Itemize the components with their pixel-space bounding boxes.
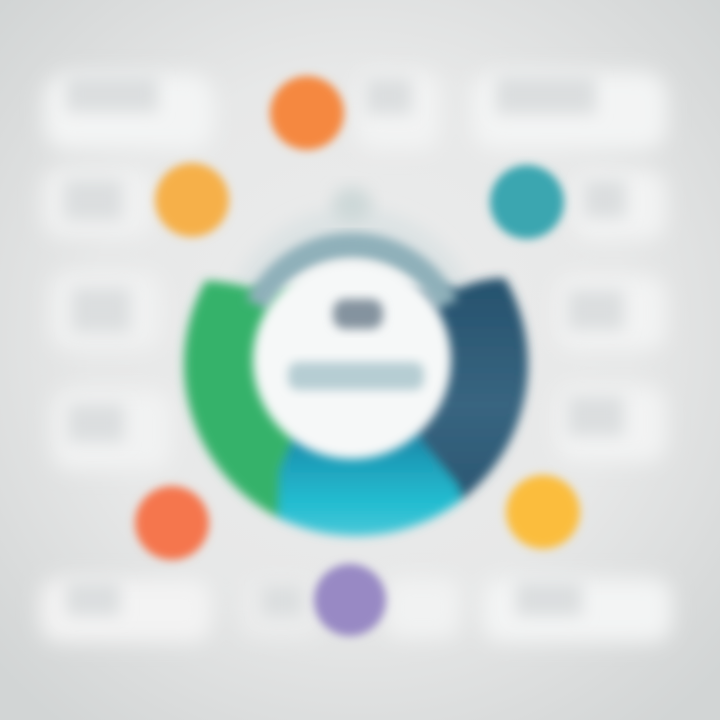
icon: orange circle bbox=[270, 76, 344, 150]
centre label bbox=[288, 362, 424, 390]
grey-blue inner ring bbox=[258, 245, 446, 305]
icon: coral circle bbox=[135, 486, 209, 560]
card: right row four bbox=[556, 386, 666, 462]
segment: green bbox=[176, 272, 299, 524]
centre white disc bbox=[253, 261, 451, 459]
centre icon bbox=[333, 299, 383, 329]
chart: ring bbox=[150, 245, 560, 545]
card: bottom left bbox=[40, 578, 212, 642]
card: top centre right bbox=[355, 72, 440, 150]
icon: amber circle bbox=[155, 163, 229, 237]
card: top left bbox=[44, 74, 214, 150]
card: left row four bbox=[52, 390, 172, 470]
panel: text cards bbox=[40, 72, 672, 642]
card: bottom right bbox=[482, 578, 672, 642]
segment: navy bbox=[410, 270, 536, 506]
card: right row three bbox=[556, 276, 666, 350]
card: bottom centre left bbox=[240, 580, 320, 638]
card: left row two bbox=[42, 168, 154, 238]
text placeholders in cards bbox=[64, 76, 626, 616]
card: top right bbox=[472, 72, 667, 150]
segment: cyan bbox=[271, 432, 468, 544]
icon: purple circle bbox=[314, 564, 386, 636]
card: bottom centre right bbox=[385, 578, 460, 638]
faint halo above ring bbox=[224, 207, 480, 463]
ring segments bbox=[176, 270, 536, 544]
icon: yellow circle bbox=[506, 475, 580, 549]
card: left row three bbox=[50, 272, 162, 350]
faint marker above ring bbox=[332, 187, 372, 223]
card: right row two bbox=[572, 170, 666, 240]
icon: teal circle bbox=[490, 165, 564, 239]
